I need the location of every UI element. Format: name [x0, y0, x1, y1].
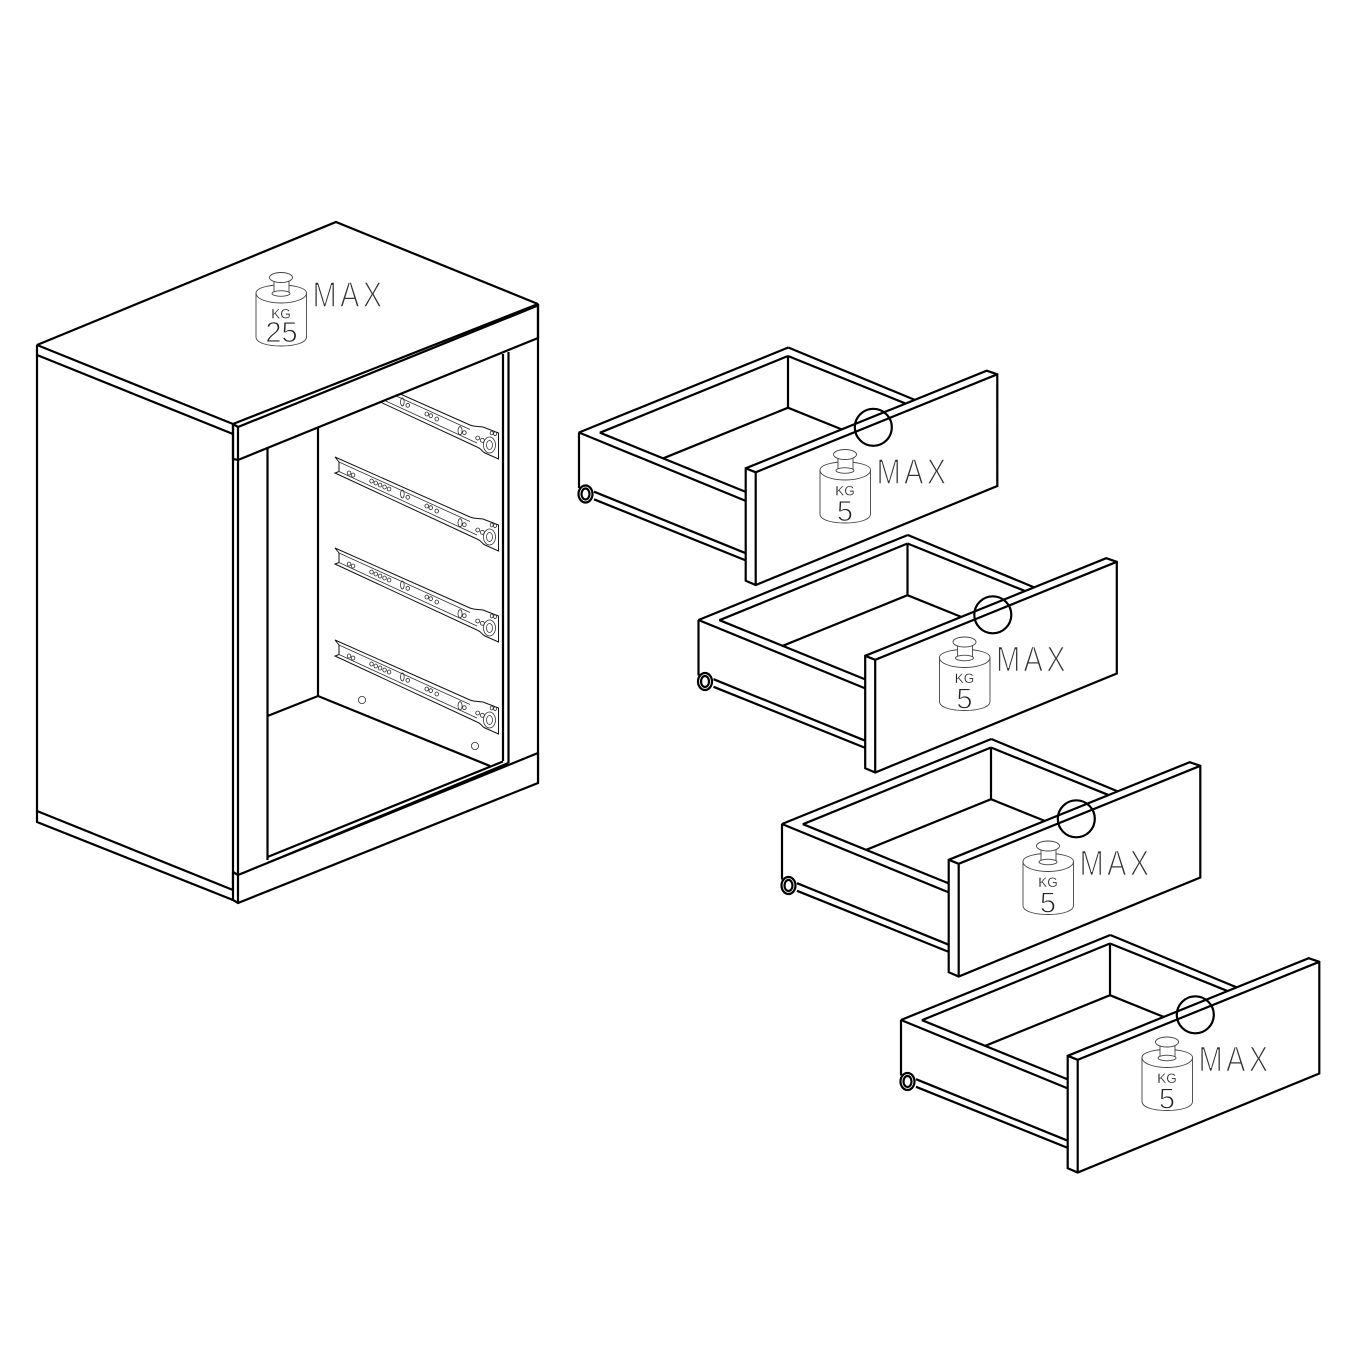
- cabinet left side panel: [37, 345, 233, 900]
- drawer 1: [578, 348, 997, 585]
- weight icon: 5 kg: [820, 450, 870, 528]
- shelf peg hole right: [471, 742, 479, 750]
- drawer body: [782, 739, 1118, 892]
- drawer slide 4: [335, 640, 498, 734]
- cabinet right and inner front edge: [238, 304, 538, 875]
- drawer roller: [782, 877, 796, 894]
- MAX label: MAX: [996, 639, 1069, 680]
- callout circle: [1058, 800, 1095, 837]
- drawer side rail: [797, 883, 949, 952]
- shelf peg hole left: [358, 696, 366, 704]
- value 5: 5: [1040, 888, 1056, 920]
- MAX label: MAX: [876, 452, 949, 493]
- cabinet interior back wall and floor: [268, 352, 508, 863]
- cabinet top front band: [233, 306, 538, 460]
- drawer side rail: [714, 679, 866, 748]
- cabinet bottom corner line: [237, 875, 239, 903]
- KG label: KG: [1157, 1071, 1177, 1086]
- drawer body: [901, 935, 1237, 1088]
- weight icon: 25 kg: [256, 272, 306, 349]
- drawer slide 2: [335, 457, 498, 551]
- cabinet top surface: [37, 222, 538, 424]
- weight icon: 5 kg: [1142, 1037, 1192, 1116]
- MAX label: MAX: [1080, 843, 1152, 884]
- KG label: KG: [835, 484, 855, 498]
- drawer 3: [782, 739, 1200, 976]
- drawer front panel: [1068, 958, 1319, 1172]
- cabinet: [37, 222, 538, 903]
- value 25: 25: [265, 317, 298, 349]
- drawer front panel: [865, 558, 1117, 772]
- drawer 4: [900, 935, 1319, 1172]
- callout circle: [974, 596, 1011, 633]
- drawer slide 3: [335, 548, 498, 642]
- callout circle: [855, 409, 892, 446]
- drawer body: [698, 535, 1034, 688]
- value 5: 5: [956, 684, 973, 716]
- cabinet top lip line: [233, 424, 238, 890]
- MAX label: MAX: [1198, 1039, 1271, 1080]
- cabinet bottom front band: [233, 753, 538, 903]
- callout circle: [1177, 996, 1214, 1033]
- drawer slide 1: [335, 365, 498, 459]
- value 5: 5: [837, 496, 853, 528]
- drawer front panel: [949, 762, 1200, 976]
- drawer 2: [698, 535, 1117, 772]
- weight icon: 5 kg: [940, 637, 990, 716]
- drawer roller: [698, 673, 712, 690]
- drawer roller: [900, 1073, 914, 1090]
- KG label: KG: [955, 671, 974, 686]
- weight icon: 5 kg: [1023, 841, 1074, 920]
- drawer side rail: [916, 1079, 1068, 1148]
- KG label: KG: [1038, 875, 1058, 890]
- drawer front panel: [746, 371, 997, 585]
- drawer roller: [578, 486, 592, 502]
- drawer body: [579, 348, 915, 501]
- KG label: KG: [271, 306, 291, 322]
- drawer side rail: [594, 492, 746, 560]
- MAX label: MAX: [312, 275, 385, 316]
- cabinet top band backing: [233, 304, 538, 460]
- value 5: 5: [1159, 1084, 1175, 1116]
